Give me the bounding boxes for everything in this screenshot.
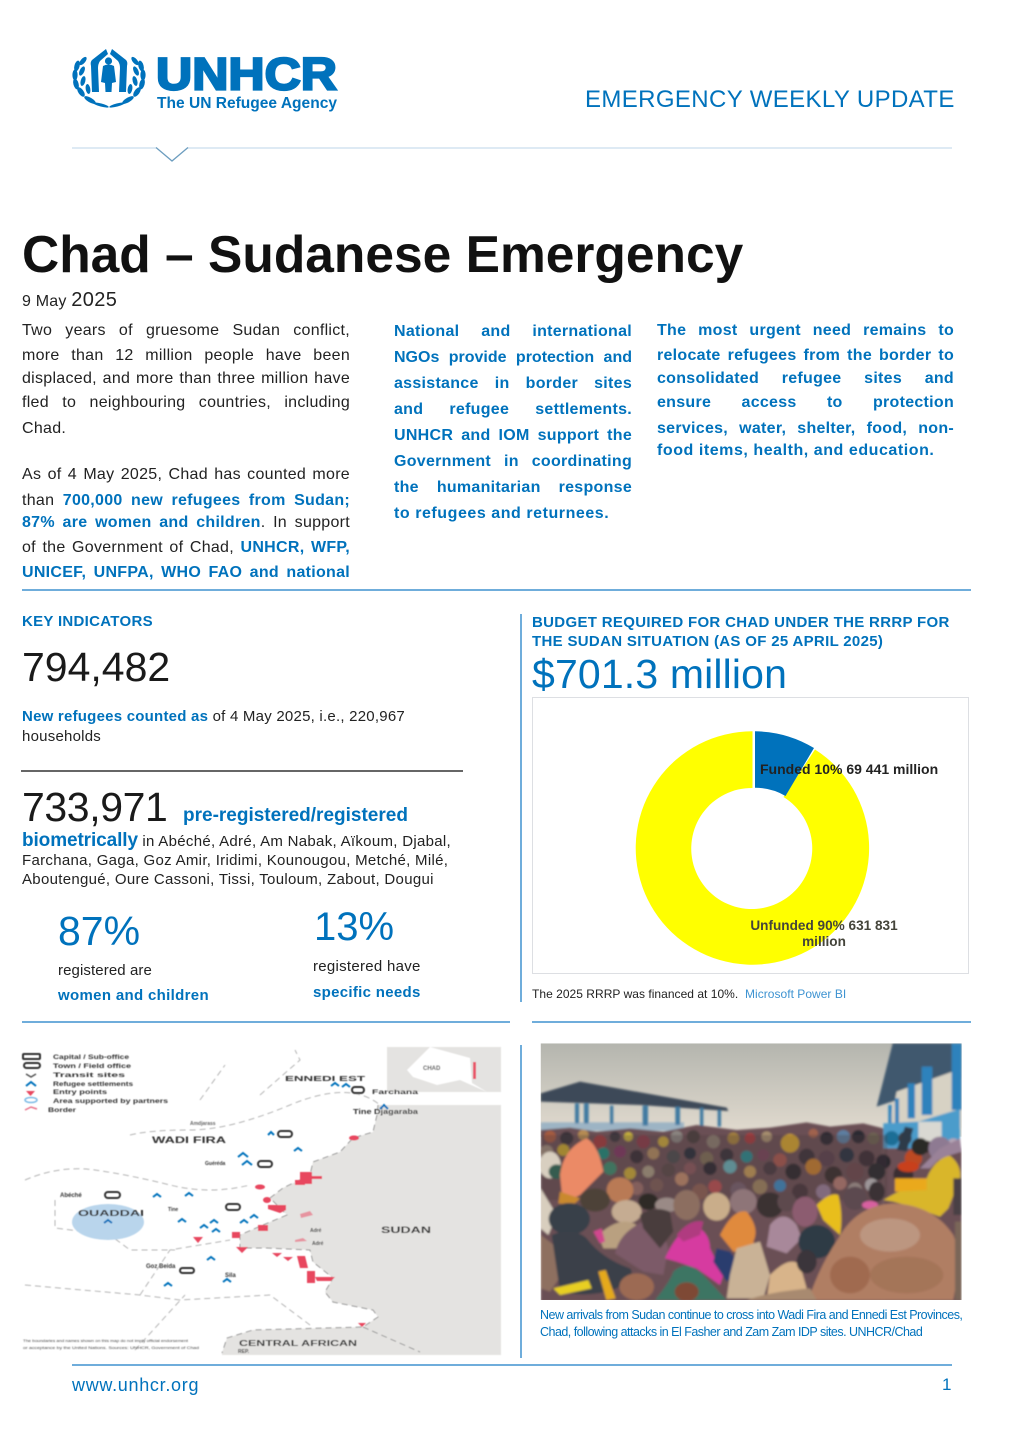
text block: intro column: fled to neighbouring countries, including bbox=[22, 394, 350, 411]
footer: website: www.unhcr.org bbox=[72, 1375, 199, 1395]
hub markers bbox=[105, 1087, 364, 1273]
heading: key indicators: KEY INDICATORS bbox=[22, 613, 153, 630]
text: new refugees description: New refugees counted as of 4 May 2025, i.e., 220,967 bbox=[22, 708, 405, 725]
text block: urgent need column bbox=[657, 322, 954, 459]
map footnote bbox=[23, 1338, 199, 1350]
legend: Area supported by partners bbox=[53, 1098, 169, 1105]
heading: budget required: THE SUDAN SITUATION (AS OF 25 APRIL 2025) bbox=[532, 633, 883, 650]
text: biometric locations: Aboutengué, Oure Cassoni, Tissi, Touloum, Zabout, Dougui bbox=[22, 871, 434, 888]
text: pre-registered heading: pre-registered/registered bbox=[183, 805, 408, 826]
text block: response column: UNHCR and IOM support the bbox=[394, 427, 632, 444]
stat: 87 percent women and children: women and children bbox=[58, 987, 209, 1004]
text block: response column: and refugee settlements. bbox=[394, 401, 632, 418]
text block: intro column: displaced, and more than three million have bbox=[22, 370, 350, 387]
region labels: Farchana bbox=[372, 1090, 419, 1096]
text block: urgent need column: services, water, shelter, food, non- bbox=[657, 420, 954, 437]
patterned shawl in foreground bbox=[808, 1203, 958, 1300]
region labels: REP. bbox=[238, 1349, 250, 1355]
figure: registered: 733,971 bbox=[22, 784, 167, 830]
region labels: WADI FIRA bbox=[152, 1135, 227, 1145]
text block: urgent need column: The most urgent need remains to bbox=[657, 322, 954, 339]
border entry points bbox=[193, 1136, 366, 1327]
region labels: CENTRAL AFRICAN bbox=[239, 1339, 357, 1348]
caption: photo bbox=[540, 1308, 962, 1339]
region labels: Adré bbox=[312, 1241, 324, 1247]
text block: intro column: Chad. bbox=[22, 420, 66, 437]
text: new refugees description bbox=[22, 708, 405, 745]
text block: intro column: than 700,000 new refugees from Sudan; bbox=[22, 492, 350, 509]
stat: 87 percent women and children: registered are bbox=[58, 962, 152, 979]
text block: response column: to refugees and returnees. bbox=[394, 505, 609, 522]
footer: page number: 1 bbox=[942, 1375, 951, 1394]
panel: key indicators bbox=[21, 613, 463, 1004]
photo: new arrivals crowd bbox=[540, 1043, 962, 1300]
legend: Entry points bbox=[53, 1089, 108, 1096]
panel: budget bbox=[532, 614, 969, 1001]
region labels: Tine bbox=[168, 1207, 178, 1213]
text block: urgent need column: relocate refugees from the border to bbox=[657, 347, 954, 364]
stat: 13 percent specific needs: specific needs bbox=[313, 984, 421, 1001]
text block: intro column: UNICEF, UNFPA, WHO FAO and national bbox=[22, 564, 350, 581]
chart box: funding donut bbox=[532, 697, 969, 974]
text: biometric locations: biometrically in Abéché, Adré, Am Nabak, Aïkoum, Djabal, bbox=[22, 830, 451, 851]
text block: intro column: As of 4 May 2025, Chad has counted more bbox=[22, 466, 350, 483]
refugee site markers bbox=[104, 1083, 388, 1286]
orange-red robed figure bbox=[560, 1138, 603, 1200]
region labels: Abéché bbox=[60, 1193, 82, 1199]
text: biometric locations bbox=[22, 830, 451, 888]
date: 9 May 2025 bbox=[22, 289, 117, 311]
text block: response column bbox=[394, 323, 632, 522]
text block: intro column bbox=[22, 322, 350, 581]
header divider with chevron bbox=[72, 147, 952, 162]
legend: Border bbox=[48, 1107, 77, 1114]
neighbouring country: Sudan: SUDAN bbox=[381, 1225, 431, 1235]
text block: response column: NGOs provide protection and bbox=[394, 349, 632, 366]
title: Chad – Sudanese Emergency bbox=[22, 225, 743, 283]
text block: intro column: of the Government of Chad, UNHCR, WFP, bbox=[22, 539, 350, 556]
text block: urgent need column: consolidated refugee sites and bbox=[657, 370, 954, 387]
region labels: Guéréda bbox=[205, 1161, 226, 1167]
label: unfunded: Unfunded 90% 631 831 million bbox=[750, 918, 898, 949]
region labels: Adré bbox=[310, 1228, 322, 1234]
borders bbox=[25, 1050, 420, 1353]
text block: intro column: Two years of gruesome Sudan conflict, bbox=[22, 322, 350, 339]
legend: Transit sites bbox=[53, 1072, 126, 1079]
foreground bbox=[541, 1188, 557, 1235]
caption: photo: New arrivals from Sudan continue to cross into Wadi Fira and Ennedi Est Provinces, bbox=[540, 1308, 962, 1322]
wordmark: UNHCR bbox=[156, 48, 337, 100]
text block: intro column: 87% are women and children. In support bbox=[22, 514, 350, 531]
heading: budget required: BUDGET REQUIRED FOR CHAD UNDER THE RRRP FOR bbox=[532, 614, 950, 631]
legend bbox=[23, 1054, 169, 1114]
map footnote: or acceptance by the United Nations. Sources: UNHCR, Government of Chad bbox=[23, 1345, 199, 1350]
stat: 87 percent women and children: 87% bbox=[58, 908, 140, 954]
stat: 13 percent specific needs: registered have bbox=[313, 958, 421, 975]
region labels: ENNEDI EST bbox=[285, 1076, 366, 1083]
Ouaddai highlight bbox=[72, 1204, 144, 1240]
figure: new refugees: 794,482 bbox=[22, 644, 170, 690]
segment: funded 10 percent bbox=[755, 731, 814, 796]
legend: Refugee settlements bbox=[53, 1081, 133, 1088]
distant crowd bbox=[544, 1131, 556, 1143]
neighbouring country: Sudan bbox=[222, 1105, 501, 1355]
legend: Capital / Sub-office bbox=[53, 1054, 129, 1061]
header label: EMERGENCY WEEKLY UPDATE bbox=[585, 86, 955, 113]
caption: financing: The 2025 RRRP was financed at 10%. Microsoft Power BI bbox=[532, 987, 846, 1001]
text: new refugees description: households bbox=[22, 728, 101, 745]
text block: response column: National and international bbox=[394, 323, 632, 340]
segment: unfunded 90 percent bbox=[636, 731, 869, 965]
yellow robed figure bbox=[883, 1156, 960, 1217]
inset map: CHAD bbox=[423, 1066, 441, 1072]
stat: 13 percent specific needs bbox=[313, 905, 421, 1001]
crowd tone overlay bbox=[541, 1135, 887, 1200]
stat: 13 percent specific needs: 13% bbox=[314, 905, 394, 949]
text: biometric locations: Farchana, Gaga, Goz Amir, Iridimi, Kounougou, Metché, Milé, bbox=[22, 852, 448, 869]
caption: photo: Chad, following attacks in El Fasher and Zam Zam IDP sites. UNHCR/Chad bbox=[540, 1325, 922, 1339]
region labels bbox=[60, 1076, 419, 1355]
text block: response column: Government in coordinating bbox=[394, 453, 632, 470]
logo: UNHCR bbox=[72, 48, 338, 112]
text block: response column: the humanitarian response bbox=[394, 479, 632, 496]
region labels: OUADDAI bbox=[78, 1209, 144, 1218]
mid crowd bbox=[607, 1177, 633, 1203]
stat: 87 percent women and children bbox=[58, 908, 209, 1004]
region labels: Tine Djagaraba bbox=[353, 1109, 418, 1116]
inset map bbox=[387, 1047, 501, 1092]
map: Chad refugee locations bbox=[21, 1046, 502, 1356]
tagline: The UN Refugee Agency bbox=[157, 95, 337, 112]
region labels: Goz Beida bbox=[146, 1264, 176, 1270]
text block: urgent need column: ensure access to protection bbox=[657, 394, 954, 411]
text block: urgent need column: food items, health, and education. bbox=[657, 442, 934, 459]
map footnote: The boundaries and names shown on this map do not imply official endorsement bbox=[23, 1338, 189, 1343]
icon: UNHCR emblem bbox=[72, 49, 146, 109]
donut chart bbox=[636, 731, 870, 965]
legend: Town / Field office bbox=[53, 1063, 132, 1070]
label: funded: Funded 10% 69 441 million bbox=[760, 761, 938, 777]
text block: response column: assistance in border sites bbox=[394, 375, 632, 392]
text block: intro column: more than 12 million people have been bbox=[22, 347, 350, 364]
figure: budget total: $701.3 million bbox=[532, 651, 787, 697]
region labels: Amdjarass bbox=[190, 1121, 216, 1127]
region labels: Sila bbox=[225, 1273, 236, 1279]
heading: budget required bbox=[532, 614, 950, 650]
